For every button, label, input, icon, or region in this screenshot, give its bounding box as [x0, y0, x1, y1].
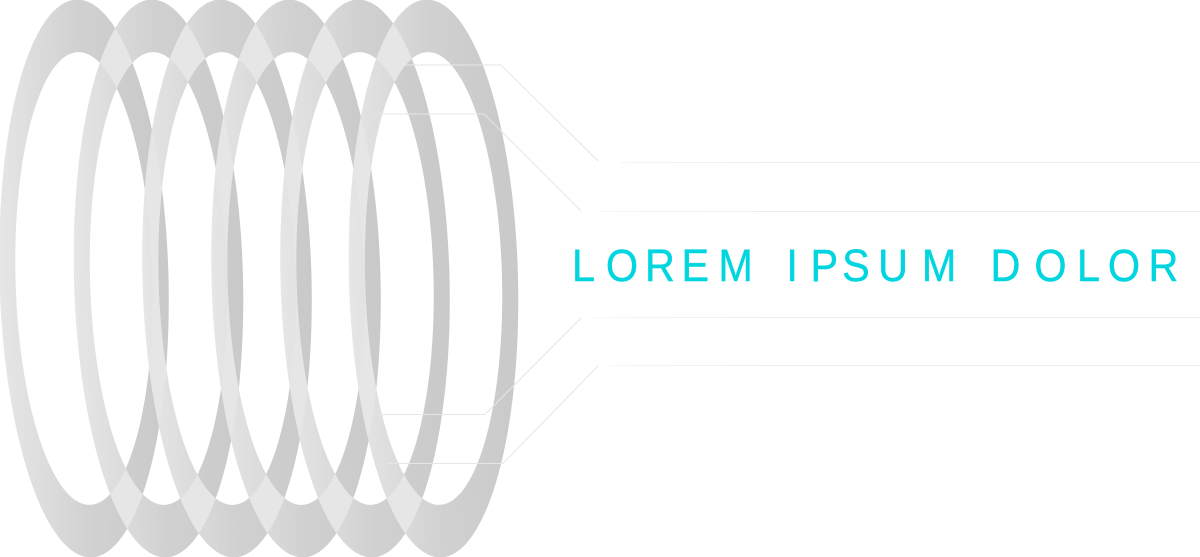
connector: top inner — [372, 114, 581, 211]
rule 3 — [593, 317, 1200, 318]
ring 6 — [342, 0, 525, 557]
ring overlaps — [101, 24, 422, 533]
rule 2 — [600, 211, 1200, 212]
rule 4 — [610, 365, 1200, 366]
rule 1 — [620, 162, 1200, 163]
horizontal rules — [593, 162, 1200, 366]
ring 3 — [135, 0, 319, 557]
connector lines — [372, 65, 598, 464]
ring 5 — [273, 0, 457, 557]
coil of six overlapping rings — [0, 0, 525, 557]
ring 1 — [0, 0, 176, 557]
connector: top outer — [385, 65, 598, 161]
ring 2 — [67, 0, 250, 557]
title: LOREM IPSUM DOLOR — [572, 241, 1178, 291]
ring 4 — [204, 0, 388, 557]
connector: bottom outer — [388, 366, 598, 464]
connector: bottom inner — [381, 318, 581, 414]
